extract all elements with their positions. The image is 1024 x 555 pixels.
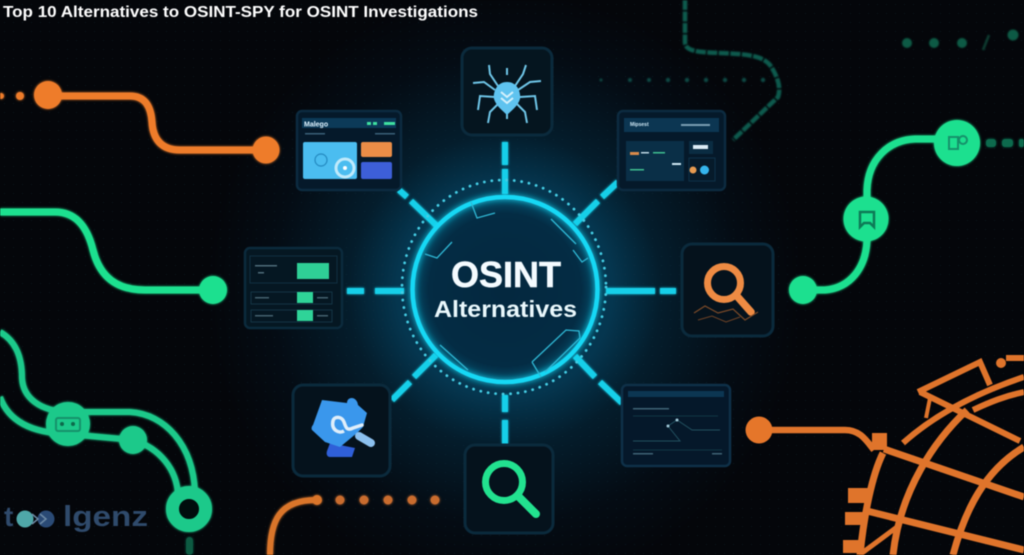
- node: document: [934, 120, 980, 166]
- panel: line chart dashboard: [622, 385, 730, 466]
- spider legs: [473, 65, 541, 123]
- node: bookmark: [844, 196, 888, 242]
- circuit: orange bottom: [270, 495, 440, 555]
- magnifier: [708, 266, 751, 312]
- node: green dot: [119, 426, 147, 454]
- node: green end dot: [789, 276, 817, 304]
- node: chip: [46, 402, 90, 446]
- line chart: [633, 418, 720, 441]
- trace lines: [694, 306, 758, 320]
- node: trailing dot: [186, 537, 193, 555]
- hub heading: OSINT: [451, 254, 561, 295]
- logo: toolgenz: [4, 501, 148, 533]
- logo mark: [16, 510, 54, 528]
- panel: Maltego dashboard: [297, 111, 401, 190]
- table row one: [251, 292, 332, 304]
- dots: top right: [902, 30, 1018, 50]
- panel: orange magnifier: [682, 244, 773, 336]
- panel: spider icon: [462, 48, 552, 135]
- indigo tile: [361, 162, 392, 179]
- puzzle pieces: [312, 398, 371, 457]
- circuit: orange top left: [0, 81, 280, 164]
- panel: green magnifier: [465, 445, 553, 533]
- gauges: [689, 158, 715, 181]
- chart area: [626, 141, 684, 181]
- node: green ring: [172, 492, 206, 526]
- green block large: [297, 263, 329, 279]
- panel: left table: [245, 248, 342, 328]
- logo: toolgenz: t: [4, 501, 13, 532]
- orange tile: [361, 142, 392, 157]
- hub disc: [412, 197, 598, 382]
- central hub: [402, 180, 606, 394]
- blue tile: [303, 142, 357, 179]
- dotted outer ring: [402, 180, 606, 394]
- spider body: [494, 82, 520, 115]
- panel: report dashboard: [618, 111, 725, 190]
- globe: [746, 358, 1024, 555]
- small widget: [689, 141, 713, 154]
- title: Top 10 Alternatives to OSINT-SPY for OSINT Investigations: [3, 4, 478, 21]
- magnifier: [486, 464, 536, 514]
- circuit: green right: [789, 120, 1024, 304]
- panel label: Malego: [304, 122, 328, 128]
- table row two: [251, 310, 332, 322]
- panel label: Mipsest: [630, 122, 649, 128]
- dots: faint row: [600, 78, 765, 82]
- panel: puzzle icon: [293, 385, 390, 476]
- logo: toolgenz: lgenz: [63, 501, 148, 533]
- hub circuit details: [425, 202, 588, 377]
- dashes: to edge: [986, 139, 1024, 147]
- circuit: green left: [0, 212, 227, 304]
- glowing ring: [412, 197, 598, 382]
- connectors: [347, 142, 676, 444]
- hub subheading: Alternatives: [434, 296, 577, 322]
- circuit: faint teal trail top right: [685, 0, 779, 140]
- circuit: green lower left: [0, 332, 206, 555]
